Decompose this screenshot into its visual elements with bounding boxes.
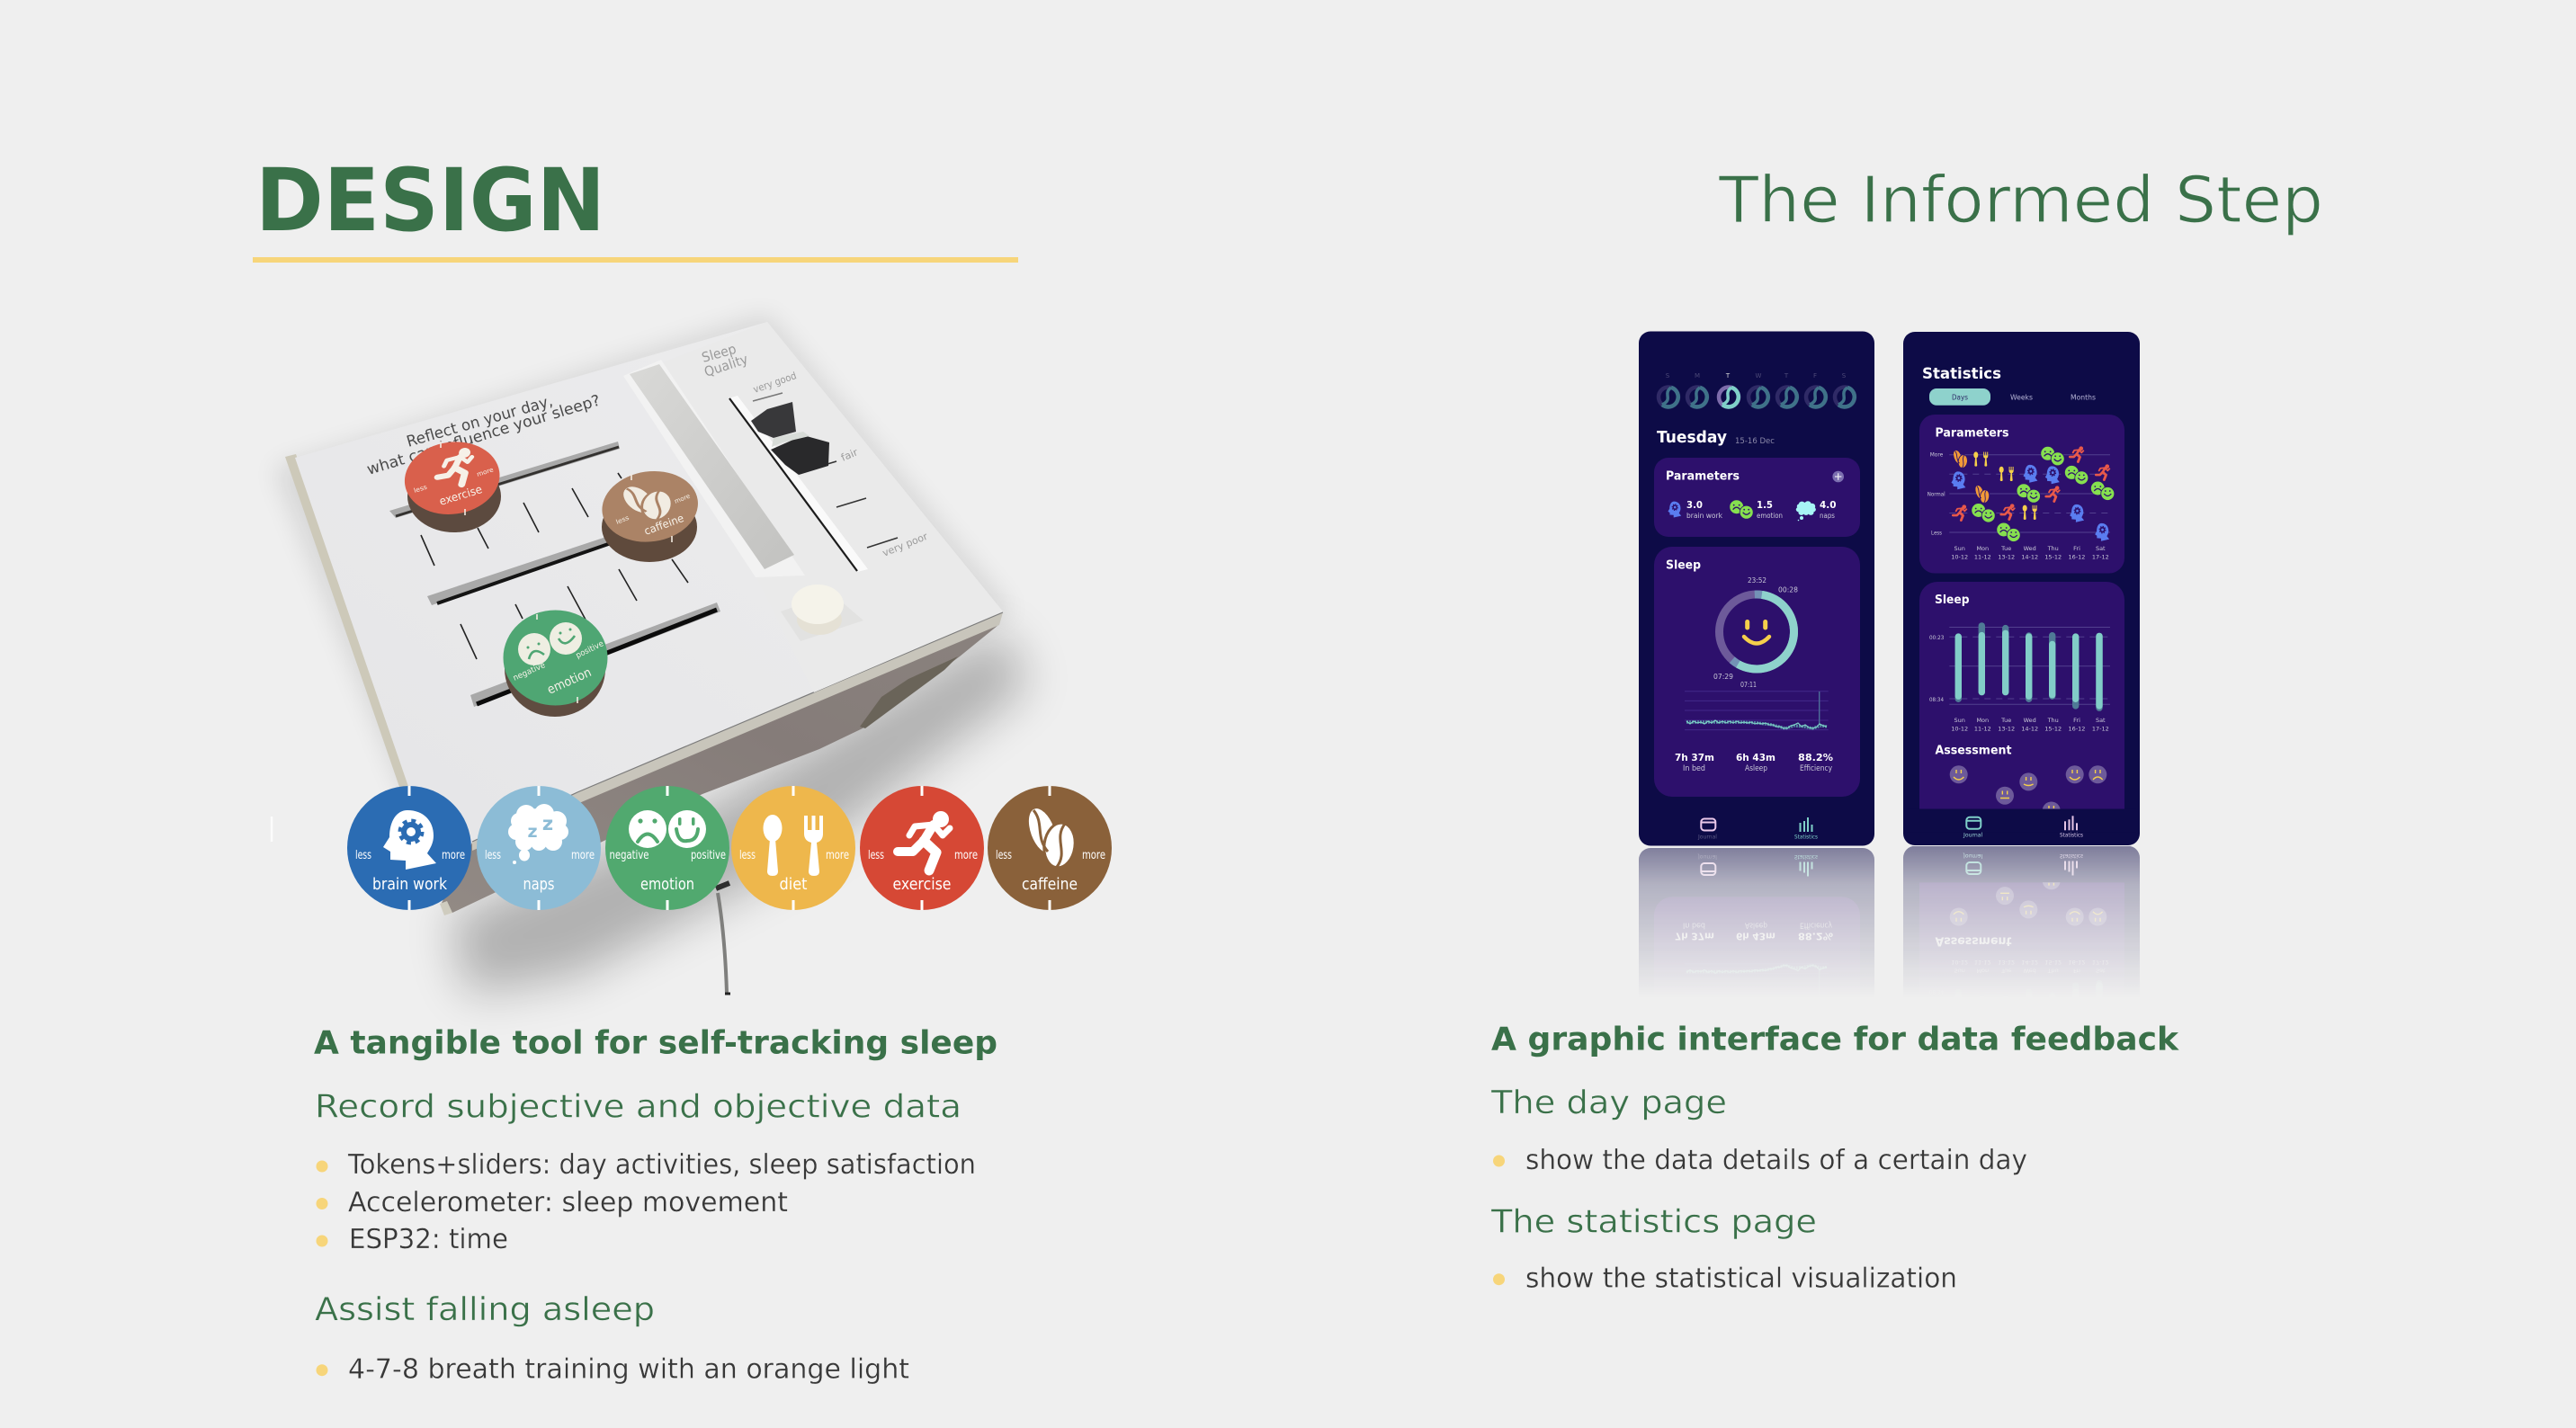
panel: sleep: 00:28 bbox=[1778, 586, 1798, 594]
sleep movement chart bbox=[1685, 692, 1829, 730]
token set: diet bbox=[731, 786, 855, 910]
token set: caffeine: caffeine bbox=[1022, 875, 1078, 894]
panel: sleep chart and assessment: Fri bbox=[2073, 717, 2080, 724]
panel: sleep chart and assessment: 17-12 bbox=[2092, 726, 2109, 733]
photo token: exercise: exercise bbox=[437, 482, 484, 508]
left text block: tangible tool bbox=[314, 1025, 997, 1386]
week sleep rings bbox=[1659, 387, 1855, 406]
date axis: Mon bbox=[1976, 545, 1989, 552]
bullet list: record data: ESP32: time bbox=[349, 1224, 508, 1255]
left subheading: assist: Assist falling asleep bbox=[315, 1291, 655, 1328]
box side bbox=[441, 625, 998, 913]
date axis: Sun bbox=[1954, 545, 1965, 552]
bullet list: record data: Tokens+sliders: day activities, sleep satisfaction bbox=[347, 1149, 976, 1181]
token set: naps: more bbox=[571, 849, 595, 862]
photo token: emotion: negative bbox=[512, 661, 547, 683]
panel: sleep chart and assessment: Thu bbox=[2047, 717, 2059, 724]
panel: parameters: 1.5 bbox=[1757, 499, 1773, 511]
date axis: 16-12 bbox=[2069, 553, 2085, 560]
slider labels: fair bbox=[839, 446, 860, 464]
panel: sleep chart and assessment: Sleep bbox=[1935, 594, 1970, 607]
smiley bbox=[1745, 620, 1749, 629]
panel: sleep chart and assessment: 16-12 bbox=[2069, 726, 2085, 733]
right panel of the top bbox=[663, 322, 1003, 692]
date axis: Thu bbox=[2047, 545, 2059, 552]
bullet: statistics page: show the statistical visualization bbox=[1525, 1263, 1957, 1295]
panel: parameters chart: More bbox=[1930, 451, 1943, 459]
panel: sleep chart and assessment: 15-12 bbox=[2044, 726, 2062, 733]
panel: parameters: brain work bbox=[1686, 512, 1723, 520]
photo token: caffeine: caffeine bbox=[642, 512, 685, 538]
token set: naps: naps bbox=[523, 875, 554, 894]
panel: parameters: naps bbox=[1820, 512, 1835, 520]
panel: sleep: In bed bbox=[1683, 764, 1705, 773]
box instructions second line: what can influence your sleep? bbox=[365, 392, 603, 479]
photo token: caffeine: less bbox=[615, 514, 631, 526]
photo token: emotion bbox=[504, 610, 608, 717]
panel: sleep chart and assessment: 13-12 bbox=[1998, 726, 2015, 733]
bullet list: record data: Accelerometer: sleep movement bbox=[348, 1187, 788, 1218]
panel: sleep chart and assessment: 14-12 bbox=[2021, 726, 2038, 733]
photo: tangible sleep tracking box bbox=[272, 315, 1030, 994]
panel: sleep chart and assessment bbox=[1919, 582, 2124, 820]
photo token: emotion: emotion bbox=[545, 665, 594, 698]
box instructions text: Reflect on your day, bbox=[405, 392, 555, 451]
week letters: S bbox=[1842, 372, 1847, 379]
panel: sleep: 88.2% bbox=[1798, 752, 1833, 763]
date axis: 11-12 bbox=[1974, 553, 1991, 560]
week letters: W bbox=[1756, 372, 1762, 379]
token set: brain work: more bbox=[442, 849, 465, 862]
fader ticks bbox=[753, 393, 783, 401]
week letters: M bbox=[1695, 372, 1700, 379]
date axis: 13-12 bbox=[1998, 553, 2015, 560]
panel: parameters chart: Normal bbox=[1928, 490, 1945, 497]
panel: sleep: 07:29 bbox=[1713, 673, 1733, 681]
slider labels bbox=[700, 341, 930, 559]
slider labels: Sleep bbox=[700, 341, 738, 366]
week letters bbox=[1666, 372, 1847, 379]
panel: parameters bbox=[1654, 458, 1860, 537]
date axis: Wed bbox=[2024, 545, 2036, 552]
fader knob bbox=[751, 402, 796, 438]
title: The Informed Step: The Informed Step bbox=[1718, 163, 2323, 237]
bullet list: record data bbox=[317, 1149, 976, 1255]
token set: brain work bbox=[347, 786, 471, 910]
panel: sleep chart and assessment: 00:23 bbox=[1929, 634, 1944, 641]
panel: sleep: 7h 37m bbox=[1675, 752, 1714, 763]
token set: exercise: less bbox=[868, 849, 884, 862]
date axis bbox=[1951, 545, 2109, 560]
token set: emotion: negative bbox=[610, 849, 649, 862]
token set: emotion: positive bbox=[691, 849, 726, 862]
panel: sleep chart and assessment: 08:34 bbox=[1929, 696, 1944, 703]
period tabs: Weeks bbox=[2010, 394, 2033, 402]
panel: sleep chart and assessment: Assessment bbox=[1936, 744, 2011, 757]
date axis: Sat bbox=[2096, 545, 2106, 552]
day heading: Tuesday bbox=[1657, 428, 1727, 447]
photo token: exercise: more bbox=[476, 466, 495, 478]
token set: naps: z bbox=[542, 813, 553, 834]
panel: sleep chart and assessment: Tue bbox=[2000, 717, 2011, 724]
panel: parameters: 3.0 bbox=[1686, 499, 1703, 511]
date axis: Fri bbox=[2073, 545, 2080, 552]
bottom nav bbox=[1697, 817, 1819, 840]
token set: brain work: brain work bbox=[372, 875, 447, 894]
heading underline bbox=[253, 257, 1018, 263]
bullet: breath training: 4-7-8 breath training with an orange light bbox=[348, 1354, 909, 1386]
push button bbox=[781, 594, 863, 641]
period tabs: Months bbox=[2071, 394, 2096, 402]
week letters: F bbox=[1813, 372, 1817, 379]
token set: exercise bbox=[860, 786, 984, 910]
bottom nav: Journal bbox=[1697, 833, 1717, 840]
panel: parameters: Parameters bbox=[1666, 469, 1740, 484]
token set: diet: diet bbox=[779, 875, 808, 894]
panel: parameters: 4.0 bbox=[1820, 499, 1837, 511]
slider slots bbox=[389, 442, 720, 707]
bullet: day page: show the data details of a certain day bbox=[1525, 1145, 2027, 1176]
date: 15-16 Dec bbox=[1735, 437, 1775, 446]
token set: emotion: emotion bbox=[640, 875, 694, 894]
bottom nav: Journal bbox=[1963, 832, 1982, 839]
panel: sleep chart and assessment: 10-12 bbox=[1951, 726, 1968, 733]
left heading: A tangible tool for self-tracking sleep bbox=[314, 1025, 997, 1062]
photo token: caffeine: more bbox=[674, 493, 691, 505]
right subheading: day page: The day page bbox=[1490, 1084, 1727, 1121]
cable bbox=[718, 893, 727, 993]
token set: brain work: less bbox=[355, 849, 371, 862]
right text block: graphic interface bbox=[1490, 1022, 2179, 1295]
plotted parameter icons bbox=[1951, 446, 2115, 541]
right subheading: statistics page: The statistics page bbox=[1490, 1204, 1817, 1241]
period tabs: Days bbox=[1952, 394, 1968, 402]
infographic canvas bbox=[253, 165, 2319, 1384]
date axis: 10-12 bbox=[1951, 553, 1968, 560]
panel: parameters: emotion bbox=[1757, 512, 1783, 520]
bottom nav: Statistics bbox=[2060, 832, 2084, 839]
panel: sleep: Sleep bbox=[1666, 559, 1701, 572]
bottom nav bbox=[1907, 809, 2136, 839]
assessment faces bbox=[1950, 765, 2106, 820]
phone screen: statistics page bbox=[1903, 332, 2140, 845]
photo token: exercise: less bbox=[413, 484, 428, 495]
panel: sleep bbox=[1654, 547, 1860, 797]
box top face bbox=[295, 322, 1003, 854]
slider labels: very poor bbox=[881, 531, 930, 559]
panel: sleep: 23:52 bbox=[1748, 576, 1767, 585]
sleep ring bbox=[1720, 594, 1793, 669]
reflection: day page bbox=[1639, 848, 1874, 984]
panel: sleep chart and assessment: Mon bbox=[1976, 717, 1989, 724]
bottom nav: Statistics bbox=[1794, 833, 1819, 840]
panel: sleep chart and assessment: Sat bbox=[2096, 717, 2106, 724]
date axis: 17-12 bbox=[2092, 553, 2109, 560]
token set: naps: less bbox=[485, 849, 501, 862]
photo token: emotion: positive bbox=[575, 639, 605, 661]
token set: exercise: exercise bbox=[892, 875, 952, 894]
box front lip bbox=[472, 612, 1003, 851]
week letters: T bbox=[1725, 372, 1731, 379]
period tabs bbox=[1929, 388, 2096, 406]
panel: sleep: 07:11 bbox=[1740, 681, 1757, 689]
fader slot bbox=[729, 396, 868, 572]
right heading: A graphic interface for data feedback bbox=[1491, 1022, 2179, 1058]
week letters: T bbox=[1784, 372, 1789, 379]
slider labels: Quality bbox=[702, 351, 750, 380]
date axis: 14-12 bbox=[2021, 553, 2038, 560]
statistics heading: Statistics bbox=[1922, 365, 2001, 383]
left subheading: record data: Record subjective and objective data bbox=[315, 1089, 962, 1126]
panel: parameters chart bbox=[1919, 415, 2124, 574]
date axis: Tue bbox=[2000, 545, 2011, 552]
window bbox=[623, 360, 805, 577]
phone screen: day page bbox=[1639, 331, 1874, 845]
box left edge bbox=[285, 454, 434, 854]
token set: caffeine: more bbox=[1082, 849, 1105, 862]
panel: sleep: Efficiency bbox=[1800, 764, 1832, 773]
tick marks bbox=[421, 473, 688, 659]
panel: sleep chart and assessment: 11-12 bbox=[1974, 726, 1991, 733]
panel: parameters chart: Parameters bbox=[1936, 426, 2009, 441]
photo token: caffeine bbox=[597, 465, 702, 562]
token set: naps bbox=[477, 786, 601, 910]
panel: sleep chart and assessment: Sun bbox=[1954, 717, 1965, 724]
title: DESIGN: DESIGN bbox=[255, 150, 605, 251]
panel: sleep: 6h 43m bbox=[1736, 752, 1775, 763]
panel: parameters chart: Less bbox=[1931, 530, 1943, 537]
week letters: S bbox=[1666, 372, 1670, 379]
photo token: exercise bbox=[400, 436, 505, 532]
slider labels: very good bbox=[752, 370, 798, 396]
token set: diet: less bbox=[739, 849, 756, 862]
panel: sleep chart and assessment: Wed bbox=[2024, 717, 2036, 724]
token set: naps: z bbox=[527, 822, 538, 842]
sleep bars bbox=[1955, 622, 2103, 711]
token set: exercise: more bbox=[954, 849, 978, 862]
token set: diet: more bbox=[826, 849, 849, 862]
token set: caffeine: less bbox=[996, 849, 1012, 862]
token set: emotion bbox=[605, 786, 729, 910]
date axis: 15-12 bbox=[2044, 553, 2062, 560]
reflection: statistics page bbox=[1903, 846, 2140, 984]
panel: sleep: Asleep bbox=[1745, 764, 1767, 773]
token set: caffeine bbox=[988, 786, 1112, 910]
